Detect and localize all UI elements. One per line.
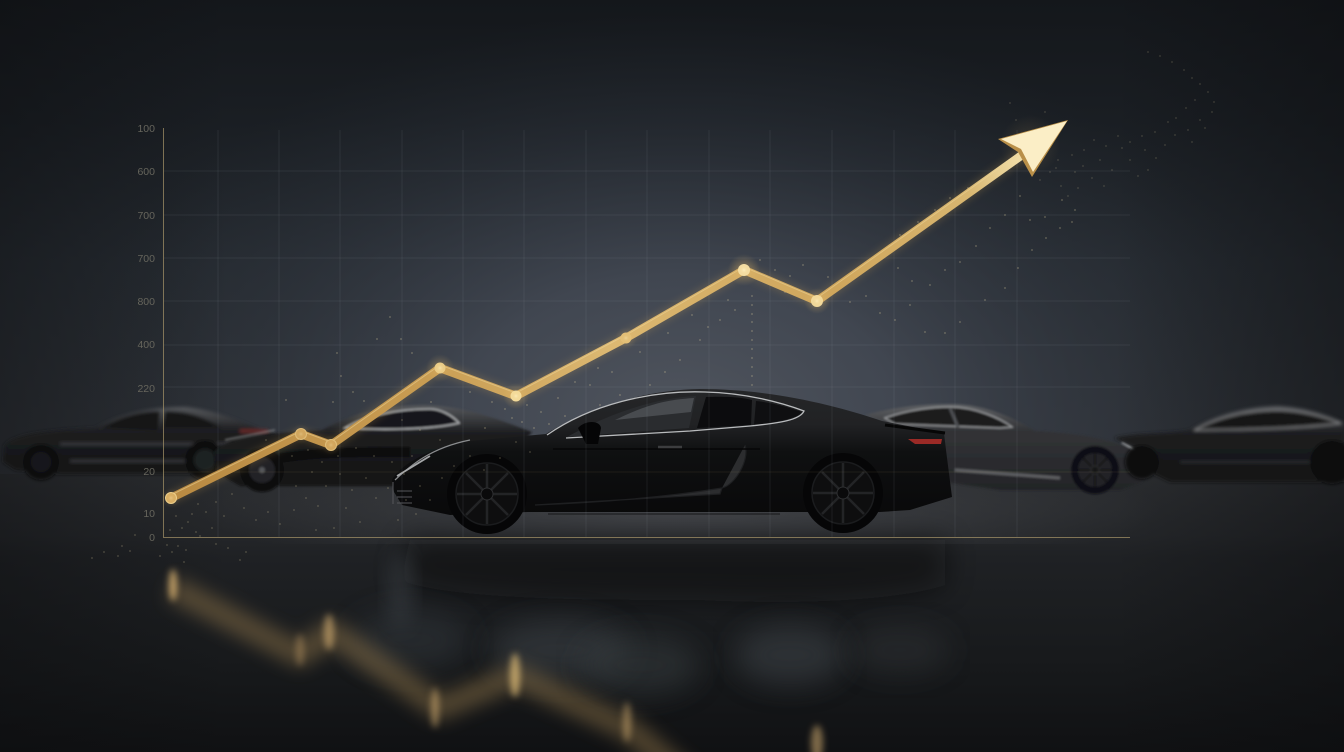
rear wheel bbox=[803, 453, 883, 533]
y axis labels: 600 bbox=[137, 166, 155, 178]
data point glows bbox=[161, 254, 830, 508]
gold rising line bbox=[171, 155, 1022, 498]
main car: black sports coupe bbox=[392, 389, 952, 534]
y axis labels bbox=[137, 123, 155, 544]
gold particles bbox=[92, 52, 1214, 562]
gold line highlight bbox=[171, 152, 1022, 495]
background car: far right bbox=[1114, 406, 1344, 484]
y axis labels: 800 bbox=[137, 296, 155, 308]
y axis labels: 10 bbox=[143, 508, 155, 520]
car body bbox=[392, 389, 952, 515]
front wheel bbox=[447, 454, 527, 534]
background car: right grey bbox=[865, 404, 1150, 494]
data points bbox=[166, 264, 823, 504]
door sculpt and sill bbox=[535, 445, 780, 514]
y axis labels: 700 bbox=[137, 253, 155, 265]
y and x axes bbox=[164, 128, 1130, 538]
tail light bbox=[908, 439, 942, 444]
background car: far left bbox=[3, 407, 276, 480]
y axis labels: 700 bbox=[137, 210, 155, 222]
floor reflection of cars and gold line bbox=[169, 540, 950, 752]
chart grid bbox=[164, 130, 1130, 537]
side mirror bbox=[578, 422, 601, 444]
line chart bbox=[92, 52, 1214, 562]
y axis labels: 400 bbox=[137, 339, 155, 351]
y axis labels: 0 bbox=[149, 532, 155, 544]
y axis labels: 20 bbox=[143, 466, 155, 478]
gold line glow bbox=[171, 155, 1022, 498]
car chrome trim bbox=[547, 392, 804, 438]
front grille bbox=[393, 482, 412, 504]
background car: second left bbox=[214, 405, 532, 492]
arrow head bbox=[998, 115, 1068, 177]
y axis labels: 220 bbox=[137, 383, 155, 395]
car windows bbox=[567, 396, 802, 437]
y axis labels: 100 bbox=[137, 123, 155, 135]
